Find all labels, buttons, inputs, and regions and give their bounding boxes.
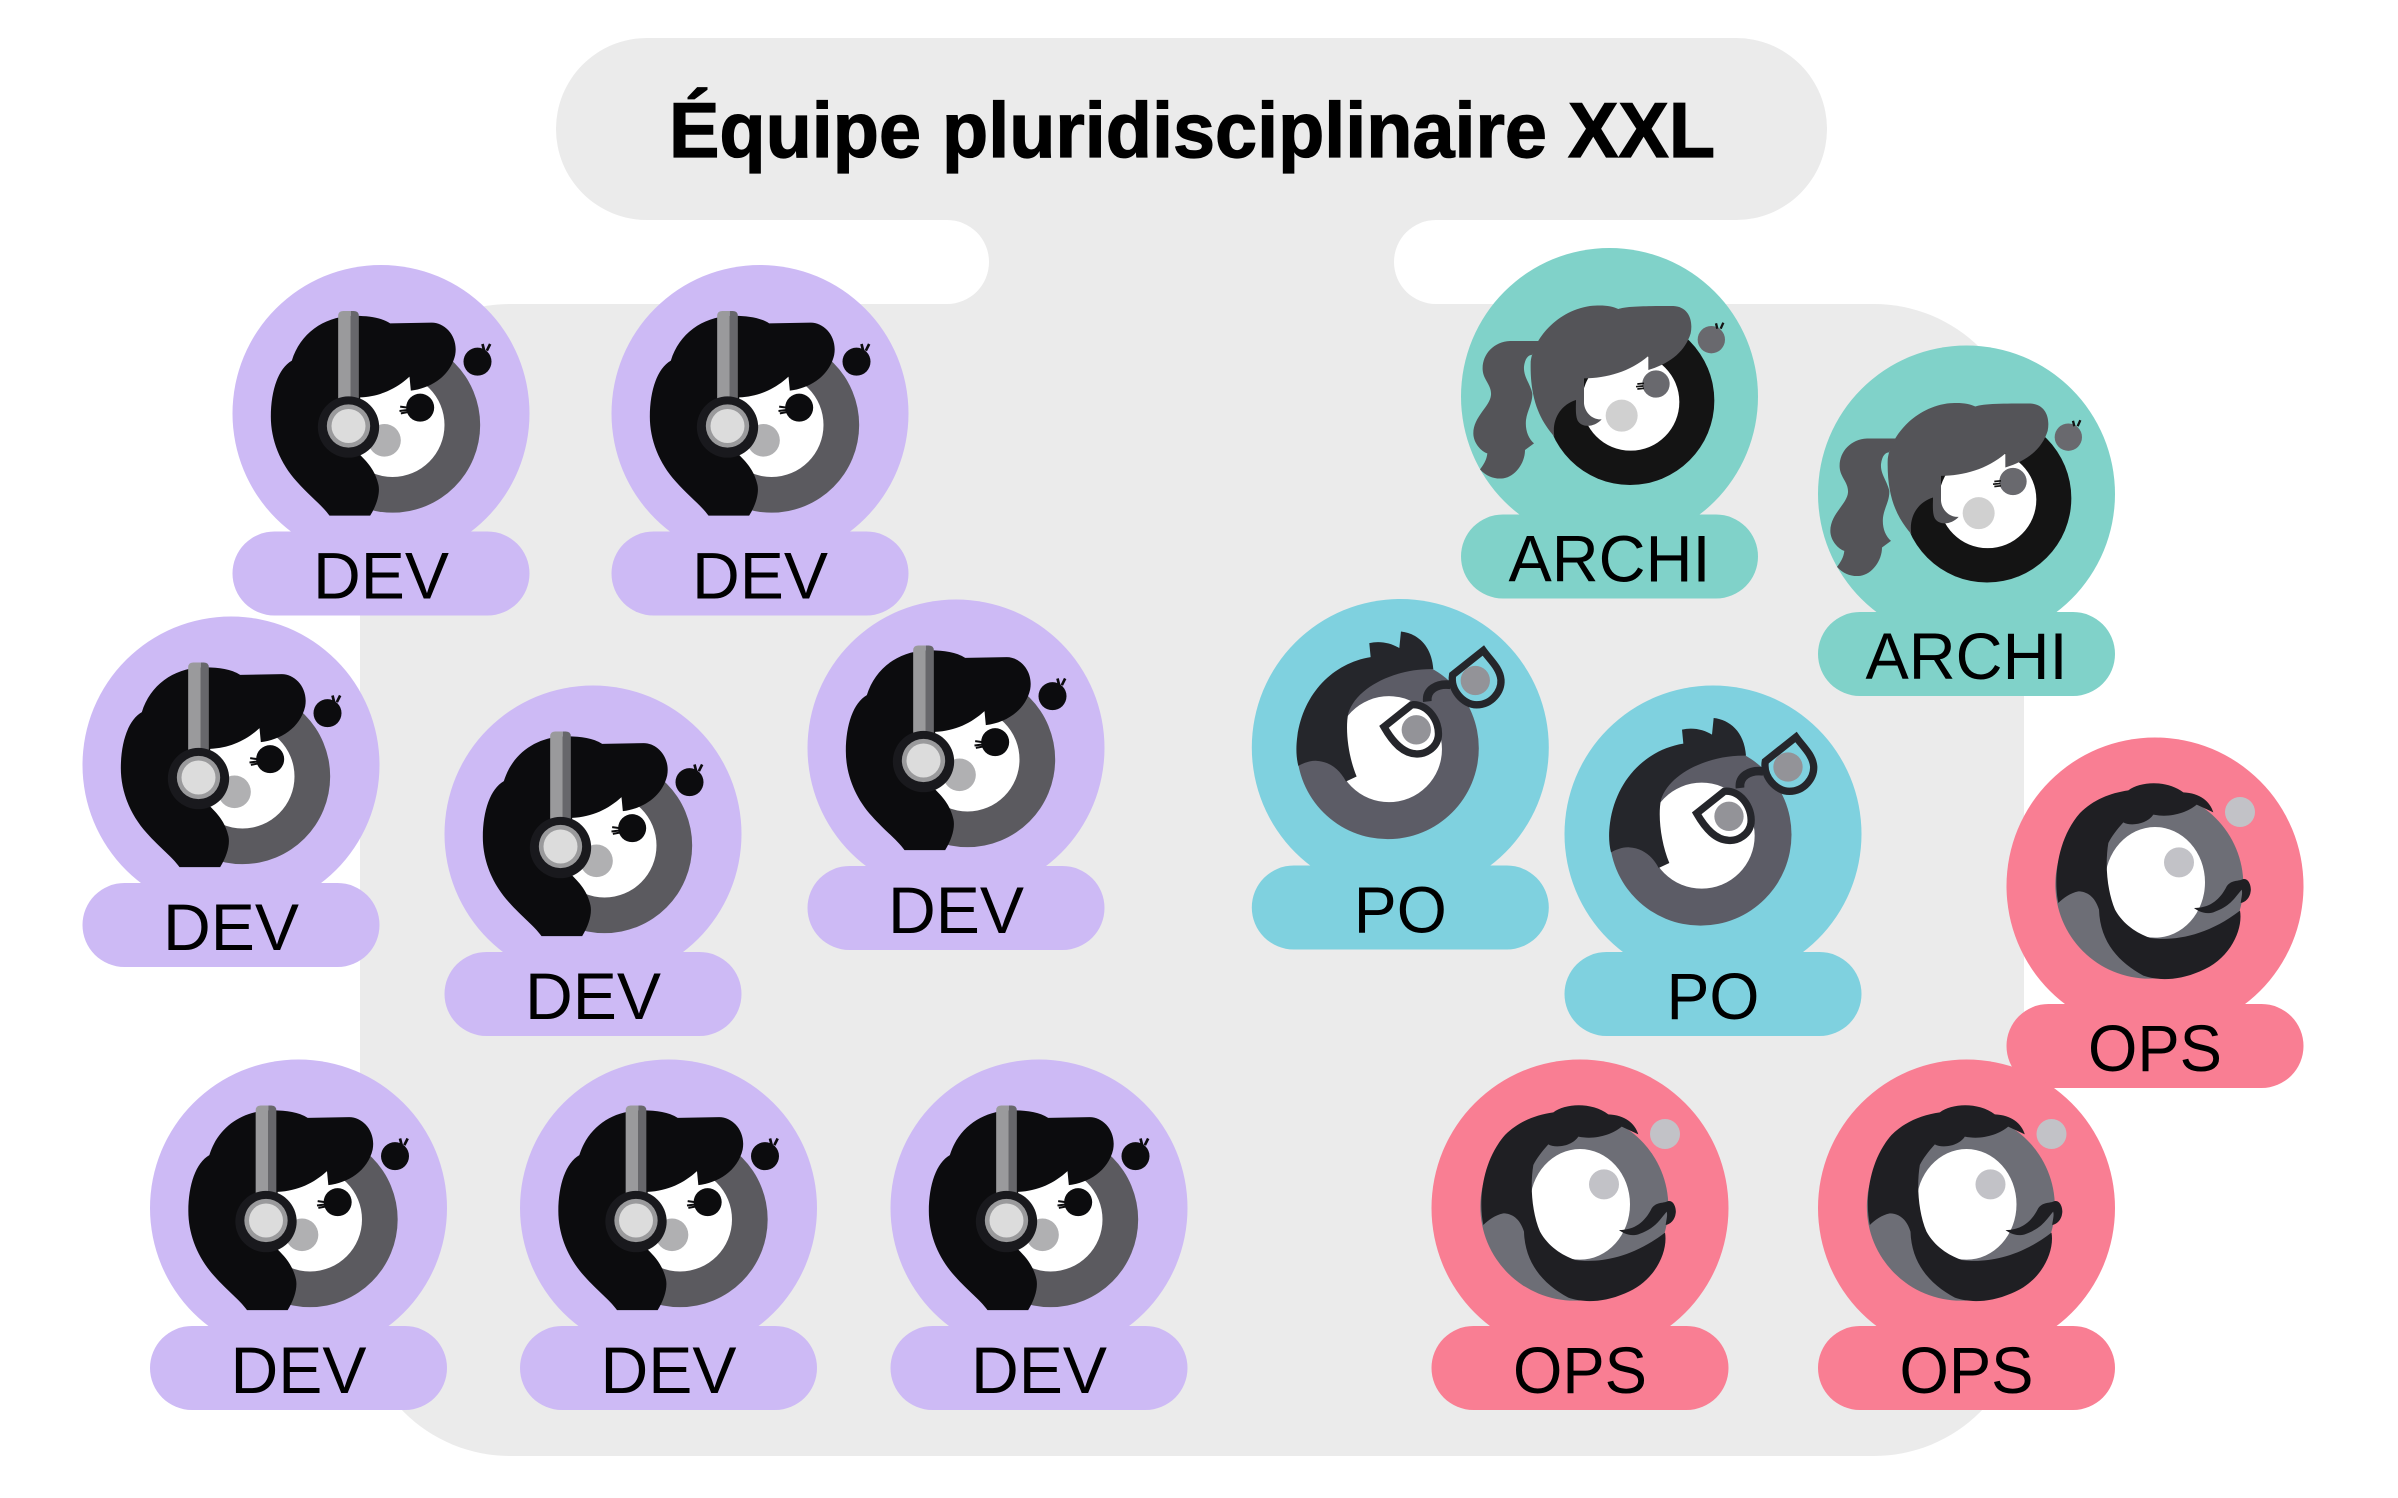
label: OPS: OPS — [1513, 1333, 1647, 1407]
label: DEV: DEV — [600, 1333, 736, 1407]
label: DEV: DEV — [230, 1333, 366, 1407]
icon: developer with headset — [846, 646, 1066, 850]
avatar: ARCHI 2 — [1818, 346, 2115, 696]
avatar: DEV 8 — [890, 1060, 1188, 1410]
label: PO: PO — [1354, 872, 1447, 946]
avatar: OPS 3 — [1818, 1060, 2115, 1410]
icon: developer with headset — [121, 663, 341, 867]
avatar: OPS 1 — [2006, 738, 2304, 1088]
label: DEV: DEV — [313, 538, 449, 612]
avatar: DEV 5 — [808, 600, 1104, 950]
avatar: PO 1 — [1252, 599, 1549, 950]
icon: ops with beard and moustache — [1480, 1105, 1680, 1301]
avatar: DEV 1 — [232, 265, 530, 616]
icon: developer with headset — [188, 1106, 409, 1310]
avatar: DEV 6 — [150, 1060, 447, 1410]
label: DEV: DEV — [971, 1333, 1107, 1407]
icon: product owner with glasses — [1609, 718, 1814, 926]
icon: ops with beard and moustache — [1867, 1105, 2066, 1301]
icon: developer with headset — [558, 1106, 779, 1310]
label: DEV: DEV — [525, 959, 661, 1033]
avatar: ARCHI 1 — [1461, 248, 1758, 598]
icon: architect with ponytail — [1473, 305, 1725, 485]
label: ARCHI: ARCHI — [1508, 522, 1710, 596]
avatar: DEV 4 — [444, 686, 742, 1036]
label: OPS: OPS — [2088, 1011, 2222, 1085]
label: DEV: DEV — [692, 538, 828, 612]
icon: developer with headset — [483, 732, 703, 936]
icon: developer with headset — [271, 311, 491, 516]
avatar: DEV 2 — [612, 265, 908, 616]
icon: architect with ponytail — [1830, 403, 2082, 582]
avatar: DEV 7 — [520, 1060, 817, 1410]
icon: product owner with glasses — [1296, 632, 1501, 839]
avatar: OPS 2 — [1432, 1060, 1728, 1410]
icon: developer with headset — [650, 311, 870, 516]
icon: developer with headset — [929, 1106, 1149, 1310]
label: OPS: OPS — [1900, 1333, 2034, 1407]
label: DEV: DEV — [888, 873, 1024, 947]
label: ARCHI: ARCHI — [1866, 619, 2068, 693]
avatar: DEV 3 — [82, 616, 380, 967]
label: DEV: DEV — [163, 890, 299, 964]
avatar: PO 2 — [1564, 686, 1862, 1036]
title banner: Équipe pluridisciplinaire XXL — [669, 86, 1715, 174]
title banner — [556, 38, 1827, 220]
icon: ops with beard and moustache — [2055, 783, 2255, 979]
label: PO: PO — [1666, 959, 1760, 1033]
